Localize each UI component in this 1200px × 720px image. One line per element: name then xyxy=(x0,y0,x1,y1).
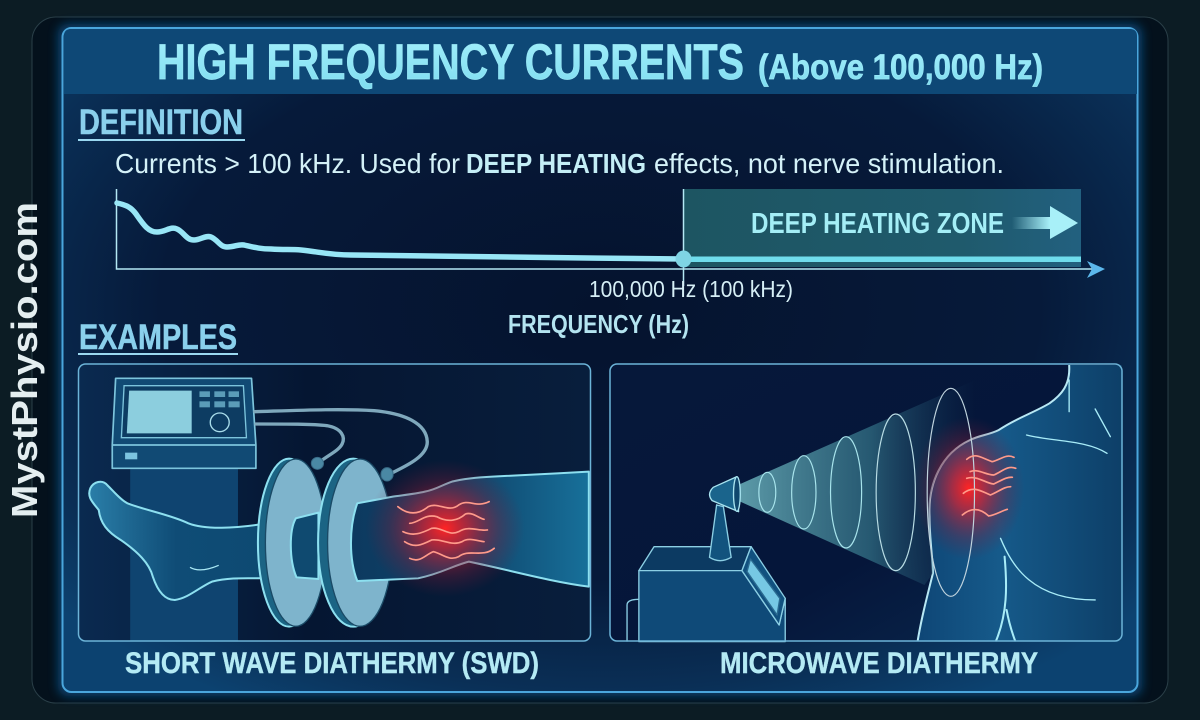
definition text: Currents > 100 kHz. Used for xyxy=(115,148,460,179)
definition text: DEEP HEATING xyxy=(466,148,646,179)
panel border xyxy=(610,364,1122,641)
caption: short wave diathermy: SHORT WAVE DIATHERMY (SWD) xyxy=(125,647,539,680)
title: HIGH FREQUENCY CURRENTS xyxy=(157,34,744,90)
icon: zone arrow xyxy=(1012,206,1078,239)
microwave beam xyxy=(740,380,975,585)
panel: short wave diathermy xyxy=(78,364,590,642)
swd machine xyxy=(112,378,256,468)
examples heading: EXAMPLES xyxy=(79,318,237,357)
definition text: effects, not nerve stimulation. xyxy=(654,148,1004,179)
deep heating zone band xyxy=(683,189,1081,267)
wave rings xyxy=(759,388,975,596)
heat waves xyxy=(398,502,494,560)
heat waves xyxy=(962,456,1016,516)
applicator stem xyxy=(710,505,731,561)
watermark: MystPhysio.com xyxy=(4,202,45,518)
frequency response curve xyxy=(117,203,683,259)
anatomy lines xyxy=(996,380,1110,641)
high frequency line xyxy=(683,256,1081,262)
title: (Above 100,000 Hz) xyxy=(758,48,1043,87)
threshold marker xyxy=(676,250,692,268)
definition heading: DEFINITION xyxy=(79,103,243,142)
definition text xyxy=(115,148,1004,179)
electrode cables xyxy=(255,410,427,473)
title band xyxy=(64,29,1137,94)
heat glow xyxy=(366,460,525,597)
caption: microwave diathermy: MICROWAVE DIATHERMY xyxy=(720,647,1038,680)
axis arrow xyxy=(1087,261,1105,278)
heat glow xyxy=(913,417,1024,560)
electrode connectors xyxy=(311,457,393,481)
applicator horn xyxy=(710,477,740,512)
upper leg xyxy=(351,472,589,587)
panel border xyxy=(78,364,590,641)
zone label: DEEP HEATING ZONE xyxy=(751,208,1004,240)
disc two xyxy=(318,459,392,627)
shoulder body xyxy=(918,365,1122,641)
device stand xyxy=(130,468,238,642)
leg between discs xyxy=(291,513,318,579)
frequency chart xyxy=(116,189,1105,339)
ankle detail xyxy=(190,565,219,570)
axis label: FREQUENCY (Hz) xyxy=(508,309,689,339)
chart axes xyxy=(116,189,1095,286)
disc one xyxy=(258,459,326,627)
panel: microwave diathermy xyxy=(610,364,1122,642)
microwave unit xyxy=(627,547,785,642)
foot and lower leg xyxy=(89,482,263,600)
threshold label: 100,000 Hz (100 kHz) xyxy=(589,276,793,302)
